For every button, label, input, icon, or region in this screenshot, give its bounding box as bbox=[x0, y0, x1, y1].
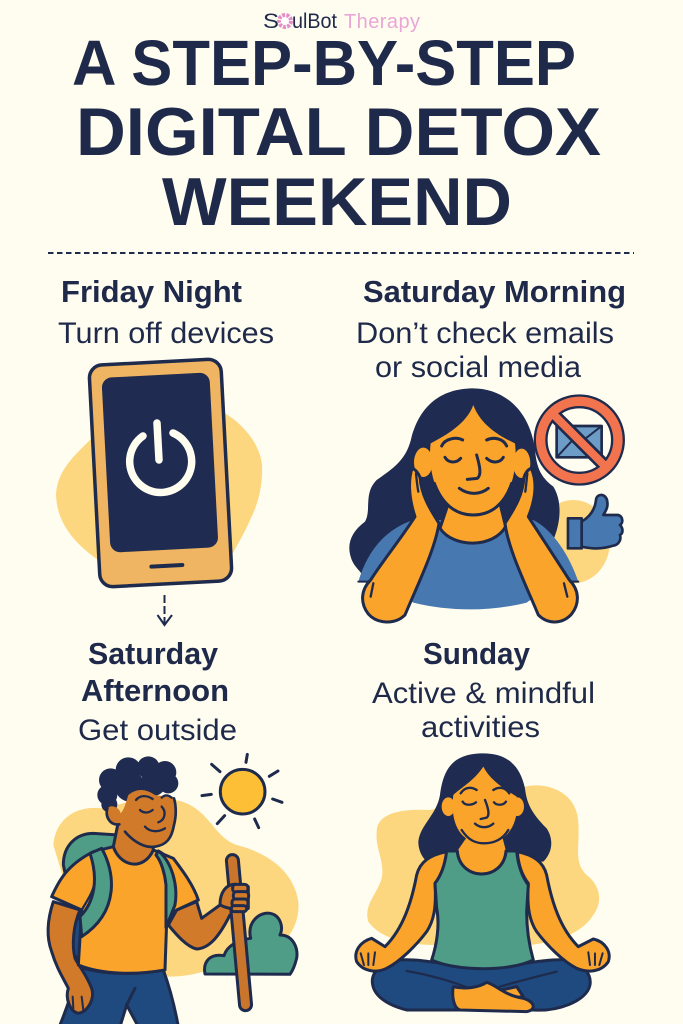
shirt bbox=[358, 520, 578, 609]
arms bbox=[356, 852, 609, 971]
hand bbox=[220, 884, 249, 912]
blob bbox=[53, 799, 298, 977]
backpack straps bbox=[80, 848, 111, 937]
bush bbox=[205, 913, 297, 974]
no-email sign bbox=[541, 401, 618, 479]
left arm bbox=[363, 468, 439, 622]
blob bbox=[367, 785, 599, 945]
face bbox=[430, 405, 516, 515]
heading: Saturday Morning: Saturday Morning bbox=[363, 274, 626, 309]
hair bbox=[418, 753, 551, 862]
left arm bbox=[48, 902, 93, 1013]
illustration: hiker with sun, bush and walking stick bbox=[48, 754, 298, 1024]
title bbox=[72, 27, 601, 240]
logo: SoulBot Therapy bbox=[263, 10, 420, 33]
neck bbox=[440, 503, 506, 543]
title: A STEP-BY-STEP bbox=[72, 27, 576, 99]
logo: SoulBot Therapy: Therapy bbox=[344, 11, 420, 33]
text: Don't check emails or social media: or social media bbox=[375, 351, 581, 384]
icon: phone with power symbol bbox=[89, 359, 232, 587]
text: Active & mindful activities: activities bbox=[421, 711, 540, 744]
heading: Friday Night: Friday Night bbox=[61, 274, 242, 309]
heading: Saturday Afternoon bbox=[81, 636, 229, 708]
walking stick bbox=[226, 854, 252, 1011]
right arm bbox=[505, 468, 577, 622]
arrow: down to Saturday Afternoon bbox=[158, 595, 172, 625]
neck bbox=[113, 822, 153, 864]
logo: SoulBot Therapy: ulBot bbox=[292, 10, 337, 33]
title: WEEKEND bbox=[162, 164, 512, 240]
title: DIGITAL DETOX bbox=[76, 94, 601, 170]
backpack bbox=[63, 833, 118, 937]
hair bbox=[349, 388, 560, 577]
text: Don't check emails or social media: Don’t check emails bbox=[356, 317, 614, 350]
ears bbox=[414, 448, 433, 477]
text: Active & mindful activities: Active & mindful bbox=[372, 677, 595, 710]
heading: Sunday: Sunday bbox=[423, 636, 531, 671]
hair bbox=[97, 756, 178, 812]
feet bbox=[453, 982, 533, 1012]
text: Turn off devices: Turn off devices bbox=[58, 317, 274, 350]
sun bbox=[220, 769, 265, 814]
tank top bbox=[432, 851, 533, 969]
neck bbox=[457, 838, 506, 874]
icon: blob behind phone bbox=[56, 412, 262, 560]
right arm bbox=[168, 883, 248, 949]
shirt bbox=[52, 847, 198, 973]
face bbox=[107, 790, 176, 846]
illustration: woman meditating bbox=[356, 753, 609, 1012]
panel: Sunday bbox=[356, 636, 609, 1012]
heading: Saturday Afternoon: Saturday bbox=[88, 636, 219, 671]
pants bbox=[59, 967, 178, 1024]
text: Get outside: Get outside bbox=[78, 714, 237, 747]
heading: Saturday Afternoon: Afternoon bbox=[81, 673, 229, 708]
panel: Friday Night bbox=[56, 274, 274, 625]
thumbs up bbox=[568, 495, 622, 548]
logo: SoulBot Therapy: S bbox=[263, 10, 279, 33]
text: Active & mindful activities bbox=[372, 677, 595, 744]
ears bbox=[442, 797, 455, 816]
illustration: woman covering ears bbox=[349, 388, 622, 622]
legs bbox=[372, 960, 590, 1010]
text: Don't check emails or social media bbox=[356, 317, 614, 384]
panel: Saturday Morning bbox=[349, 274, 626, 622]
face bbox=[453, 767, 517, 843]
panel: Saturday Afternoon bbox=[48, 636, 298, 1024]
